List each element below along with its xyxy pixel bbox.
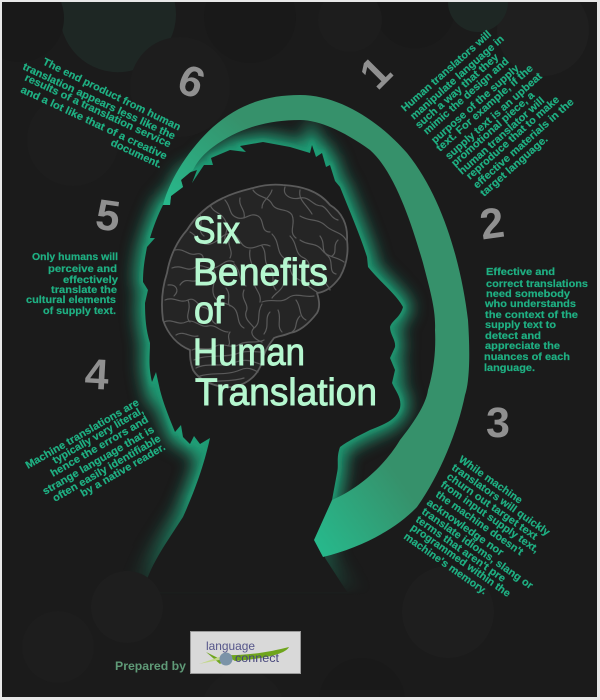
text block 2: correct translations bbox=[486, 278, 588, 290]
text block 4: often easily identifiable bbox=[50, 433, 163, 505]
number 6: 6 bbox=[171, 55, 211, 109]
text block 1: promotional piece, a bbox=[449, 89, 537, 169]
text block 6 bbox=[19, 56, 183, 171]
text block 2 bbox=[484, 266, 588, 374]
title: Benefits bbox=[193, 252, 328, 294]
logo: language connect bbox=[190, 632, 300, 674]
text block 1: manipulate language in bbox=[408, 33, 507, 122]
text block 2: the context of the bbox=[485, 309, 578, 321]
text block 2: language. bbox=[484, 362, 535, 374]
text block 2: need somebody bbox=[486, 288, 570, 300]
text block 1: effective materials in the bbox=[471, 96, 576, 191]
title: Translation bbox=[195, 372, 377, 414]
text block 1: purpose of the supply bbox=[429, 62, 522, 146]
text block 4: hence the errors and bbox=[48, 414, 151, 480]
text block 3: programmed within the bbox=[408, 522, 513, 600]
title bbox=[193, 210, 377, 414]
text block 6: The end product from human bbox=[41, 56, 183, 133]
text block 6: document. bbox=[109, 137, 164, 171]
brain bbox=[162, 185, 348, 387]
text block 4: Machine translations are bbox=[24, 397, 141, 472]
text block 3: terms that aren't pre bbox=[413, 514, 508, 585]
number 1: 1 bbox=[351, 48, 402, 99]
text block 3: from input supply text, bbox=[438, 479, 541, 556]
text block 3: translate idioms, slang or bbox=[419, 506, 535, 592]
text block 1: human translator will bbox=[456, 95, 547, 177]
text block 5: effectively bbox=[63, 274, 118, 286]
text block 3: the machine doesn't bbox=[433, 489, 526, 558]
text block 1: mimic the design and bbox=[421, 55, 511, 137]
head silhouette with green glow bbox=[143, 142, 403, 592]
text block 5 bbox=[26, 251, 118, 317]
prepared by label: Prepared by bbox=[115, 659, 186, 673]
title: Six bbox=[193, 210, 240, 252]
text block 2: appreciate the bbox=[485, 340, 560, 352]
text block 1 bbox=[399, 28, 576, 199]
text block 2: who understands bbox=[484, 298, 576, 310]
number 3: 3 bbox=[486, 399, 510, 447]
text block 2: Effective and bbox=[486, 266, 555, 278]
text block 3: acknowledge nor bbox=[424, 497, 506, 559]
logo: language connect: connect bbox=[235, 651, 280, 665]
title: of bbox=[194, 290, 224, 332]
text block 3 bbox=[401, 454, 552, 600]
text block 5: translate the bbox=[51, 284, 117, 296]
logo: language connect: language bbox=[206, 639, 255, 653]
text block 2: detect and bbox=[485, 330, 541, 342]
text block 3: churn out target text bbox=[444, 471, 540, 543]
lower background circles bbox=[22, 566, 494, 697]
text block 1: Human translators will bbox=[399, 28, 494, 114]
number 4: 4 bbox=[84, 350, 110, 400]
text block 2: nuances of each bbox=[484, 351, 570, 363]
text block 5: cultural elements bbox=[26, 294, 116, 306]
text block 3: translators will quickly bbox=[449, 462, 552, 539]
text block 4 bbox=[24, 397, 168, 505]
text block 4: typically very literal, bbox=[50, 405, 146, 467]
text block 1: supply text is an upbeat bbox=[443, 70, 545, 162]
text block 5: of supply text. bbox=[43, 305, 116, 317]
text block 5: perceive and bbox=[48, 263, 117, 275]
text block 2: supply text to bbox=[485, 319, 556, 331]
text block 4: by a native reader. bbox=[78, 441, 168, 500]
number 5: 5 bbox=[93, 191, 123, 242]
text block 5: Only humans will bbox=[32, 251, 118, 263]
text block 6: translation appears less like the bbox=[21, 61, 177, 142]
text block 3: While machine bbox=[456, 454, 525, 507]
title: Human bbox=[193, 332, 305, 374]
text block 6: results of a translation service bbox=[23, 72, 173, 150]
text block 6: and a lot like that of a creative bbox=[19, 84, 169, 162]
text block 1: reproduce that to make bbox=[464, 94, 562, 182]
number 2: 2 bbox=[477, 199, 507, 250]
green arc bbox=[163, 95, 469, 557]
text block 1: such a way that they bbox=[413, 51, 501, 131]
upper background circles bbox=[2, 2, 589, 186]
text block 3: machine's memory. bbox=[401, 531, 489, 597]
text block 4: strange language that is bbox=[40, 424, 157, 498]
text block 1: text. For example, if the bbox=[434, 62, 536, 154]
text block 1: target language. bbox=[478, 133, 550, 199]
